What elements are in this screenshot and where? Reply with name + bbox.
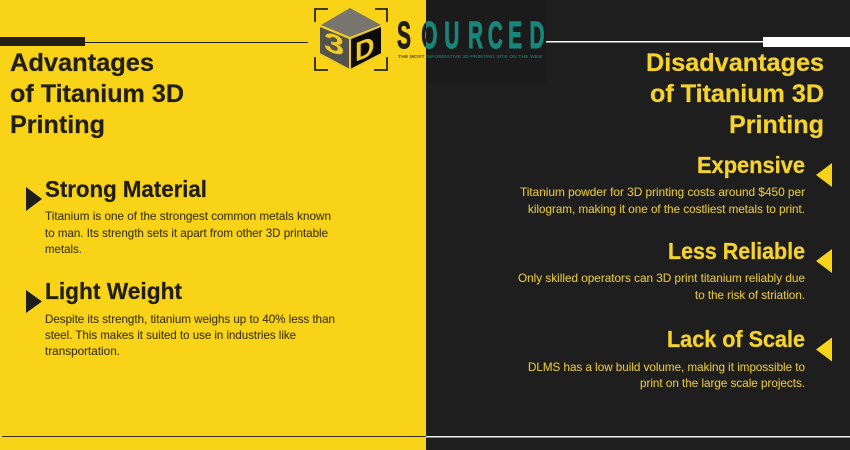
panel: disadvantages [426,0,850,450]
logo letters: 3D: 3 [324,26,344,63]
icon: arrow left [816,338,832,362]
logo backdrop [426,0,546,84]
text: lack of scale description [528,360,805,390]
icon: arrow left [816,163,832,187]
subheading: less reliable: Less Reliable [668,238,805,264]
text: less reliable description: Only skilled operators can 3D print titanium reliably due [518,271,805,285]
subheading: lack of scale: Lack of Scale [667,326,805,352]
heading: disadvantages: Printing [729,111,824,139]
text: strong material description: to man. Its strength sets it apart from other 3D printable [45,226,328,240]
heading: disadvantages: Disadvantages [646,49,824,77]
item: light weight [26,278,335,358]
icon: 3D cube with corner brackets [315,8,387,70]
header rule: right [545,37,850,47]
text: lack of scale description: DLMS has a low build volume, making it impossible to [528,360,805,374]
text: light weight description [45,312,335,358]
icon: arrow left [816,249,832,273]
heading: disadvantages: of Titanium 3D [650,80,824,108]
text: light weight description: Despite its strength, titanium weighs up to 40% less than [45,312,335,326]
text: expensive description [520,185,805,216]
text: strong material description: Titanium is one of the strongest common metals known [45,209,331,223]
text: less reliable description [518,271,805,302]
subheading: light weight: Light Weight [45,278,182,304]
footer rule: left [2,436,426,437]
item: strong material [26,176,331,256]
text: strong material description [45,209,331,256]
text: less reliable description: to the risk of striation. [695,288,805,302]
logo: 3D Sourced [315,0,546,84]
wordmark: SOURCED: SOURCED [397,15,545,57]
header rule: left [0,37,308,46]
subheading: strong material: Strong Material [45,176,207,202]
panel: advantages [0,0,426,450]
heading: advantages: Advantages [10,49,154,77]
text: strong material description: metals. [45,242,82,256]
item: lack of scale [528,326,832,390]
tagline: THE MOST INFORMATIVE 3D PRINTING SITE ON THE WEB [398,54,543,59]
text: lack of scale description: print on the large scale projects. [640,376,805,390]
text: light weight description: steel. This makes it suited to use in industries like [45,328,296,342]
footer rule: right [426,436,850,438]
subheading: expensive: Expensive [697,152,805,178]
text: light weight description: transportation. [45,344,120,358]
icon: 3D cube with corner brackets: D [355,30,375,68]
icon: arrow right [26,290,42,313]
heading: advantages [10,49,184,139]
item: less reliable [518,238,832,302]
text: expensive description: Titanium powder for 3D printing costs around $450 per [520,185,805,199]
heading: advantages: Printing [10,111,105,139]
text: expensive description: kilogram, making it one of the costliest metals to print. [528,202,805,216]
heading: disadvantages [646,49,824,139]
item: expensive [520,152,832,216]
icon: arrow right [26,187,42,211]
heading: advantages: of Titanium 3D [10,80,184,108]
